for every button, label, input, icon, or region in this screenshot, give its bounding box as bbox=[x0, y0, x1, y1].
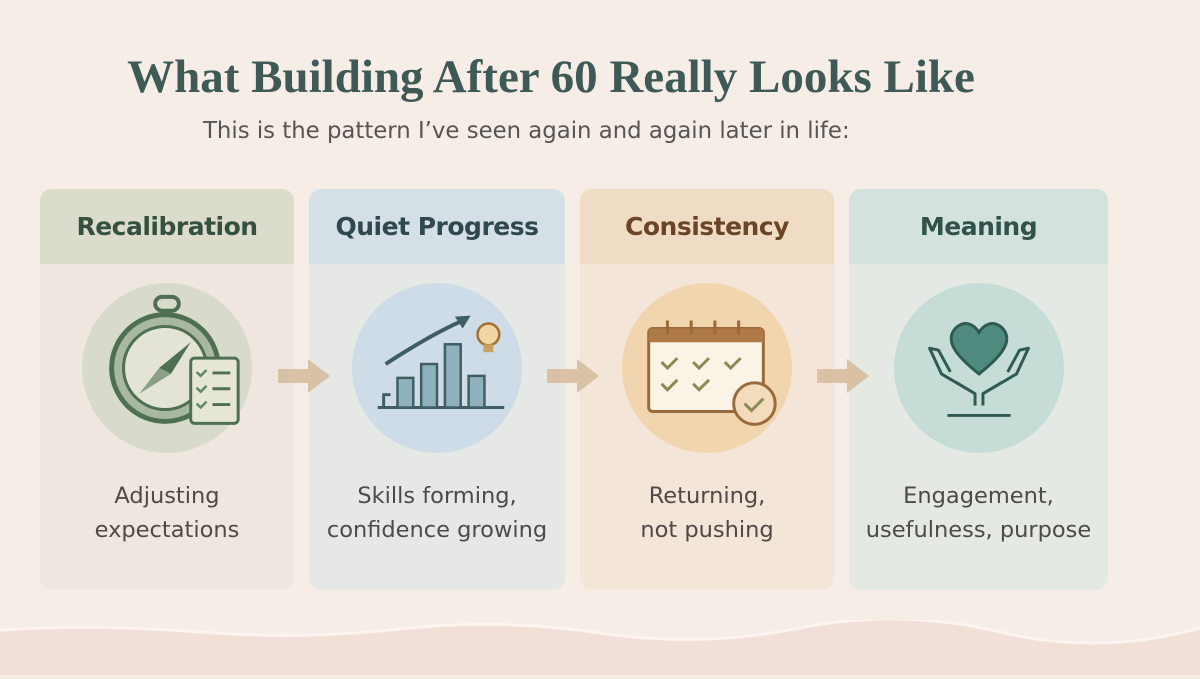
panel: consistency bbox=[580, 189, 834, 590]
heading: quiet progress bbox=[309, 189, 565, 264]
title: What Building After 60 Really Looks Like bbox=[127, 51, 975, 103]
heading: consistency: Consistency bbox=[625, 212, 789, 241]
description: usefulness, purpose bbox=[866, 517, 1091, 543]
description: not pushing bbox=[640, 517, 774, 543]
bottom torn paper strip bbox=[0, 620, 1200, 675]
arrow 2 bbox=[547, 359, 599, 393]
heading: recalibration: Recalibration bbox=[76, 212, 258, 241]
description: Skills forming, bbox=[357, 483, 517, 509]
description: expectations bbox=[95, 517, 239, 543]
panel: quiet progress bbox=[309, 189, 565, 590]
heading: quiet progress: Quiet Progress bbox=[336, 212, 538, 241]
panel: recalibration bbox=[40, 189, 294, 590]
description bbox=[95, 483, 239, 543]
icon: compass stopwatch bbox=[82, 283, 252, 453]
heading: recalibration bbox=[40, 189, 294, 264]
description bbox=[327, 483, 547, 543]
icon: calendar with checks bbox=[622, 283, 792, 453]
heading: consistency bbox=[580, 189, 834, 264]
description: Returning, bbox=[649, 483, 765, 509]
heading: meaning bbox=[849, 189, 1108, 264]
arrow 1 bbox=[278, 359, 330, 393]
description: Adjusting bbox=[114, 483, 220, 509]
arrow 3 bbox=[817, 359, 869, 393]
panel: meaning bbox=[849, 189, 1108, 590]
description: confidence growing bbox=[327, 517, 547, 543]
icon: heart in hands bbox=[894, 283, 1064, 453]
heading: meaning: Meaning bbox=[920, 212, 1037, 241]
description: Engagement, bbox=[903, 483, 1054, 509]
icon: bar chart with lightbulb bbox=[352, 283, 522, 453]
description bbox=[640, 483, 774, 543]
description bbox=[866, 483, 1091, 543]
subtitle: This is the pattern I’ve seen again and again later in life: bbox=[203, 118, 850, 144]
